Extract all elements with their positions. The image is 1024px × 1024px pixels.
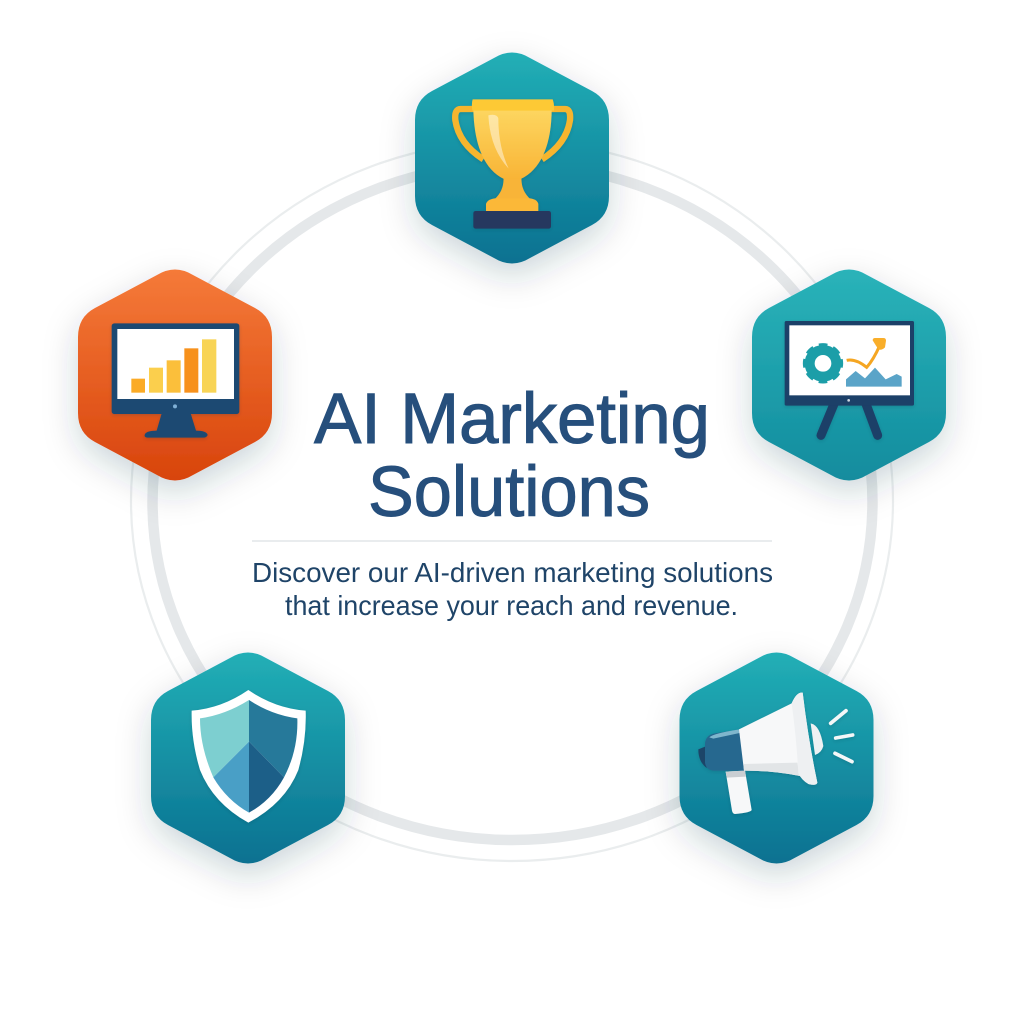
panel: trophy hexagon <box>415 52 609 264</box>
ring: thin outer circle <box>131 141 893 861</box>
icon: trophy <box>455 99 570 229</box>
panel: megaphone hexagon <box>680 652 874 864</box>
hexagon background <box>151 652 345 864</box>
panel: analytics monitor hexagon <box>78 270 272 480</box>
icon: shield <box>192 690 306 823</box>
icon: presentation board with gear and chart <box>785 321 914 435</box>
ring: thick inner circle <box>152 164 872 840</box>
panel: shield hexagon <box>151 652 345 864</box>
icon: megaphone <box>698 693 853 814</box>
title: Solutions <box>368 453 650 532</box>
hexagon background <box>752 270 946 480</box>
panel: presentation board hexagon <box>752 270 946 480</box>
hexagon background <box>415 52 609 264</box>
hexagon background <box>78 270 272 480</box>
icon: monitor with bar chart <box>112 323 239 438</box>
subtitle text <box>252 557 773 621</box>
subtitle text: Discover our AI-driven marketing solutions <box>252 557 773 588</box>
title: AI Marketing <box>314 380 710 459</box>
hexagon background <box>680 652 874 864</box>
title <box>314 380 710 532</box>
subtitle text: that increase your reach and revenue. <box>285 590 738 621</box>
